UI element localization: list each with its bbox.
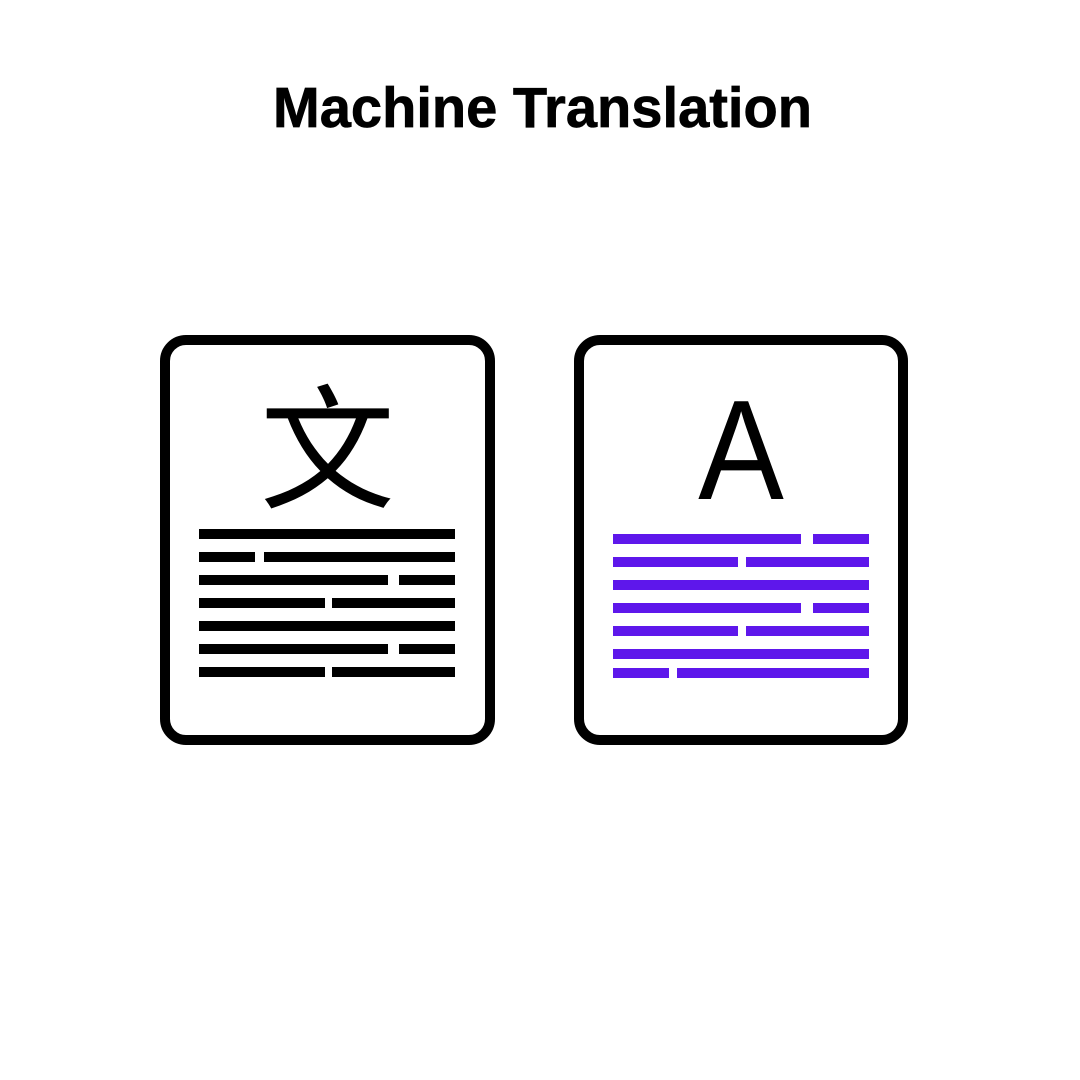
icon: letter A: A — [698, 370, 784, 529]
icon: Chinese character: 文 — [260, 376, 395, 527]
translated text lines — [613, 534, 869, 678]
panel: translated document — [579, 340, 903, 740]
panel: source document — [165, 340, 490, 740]
source text lines — [199, 529, 455, 677]
title: Machine Translation — [273, 76, 812, 140]
